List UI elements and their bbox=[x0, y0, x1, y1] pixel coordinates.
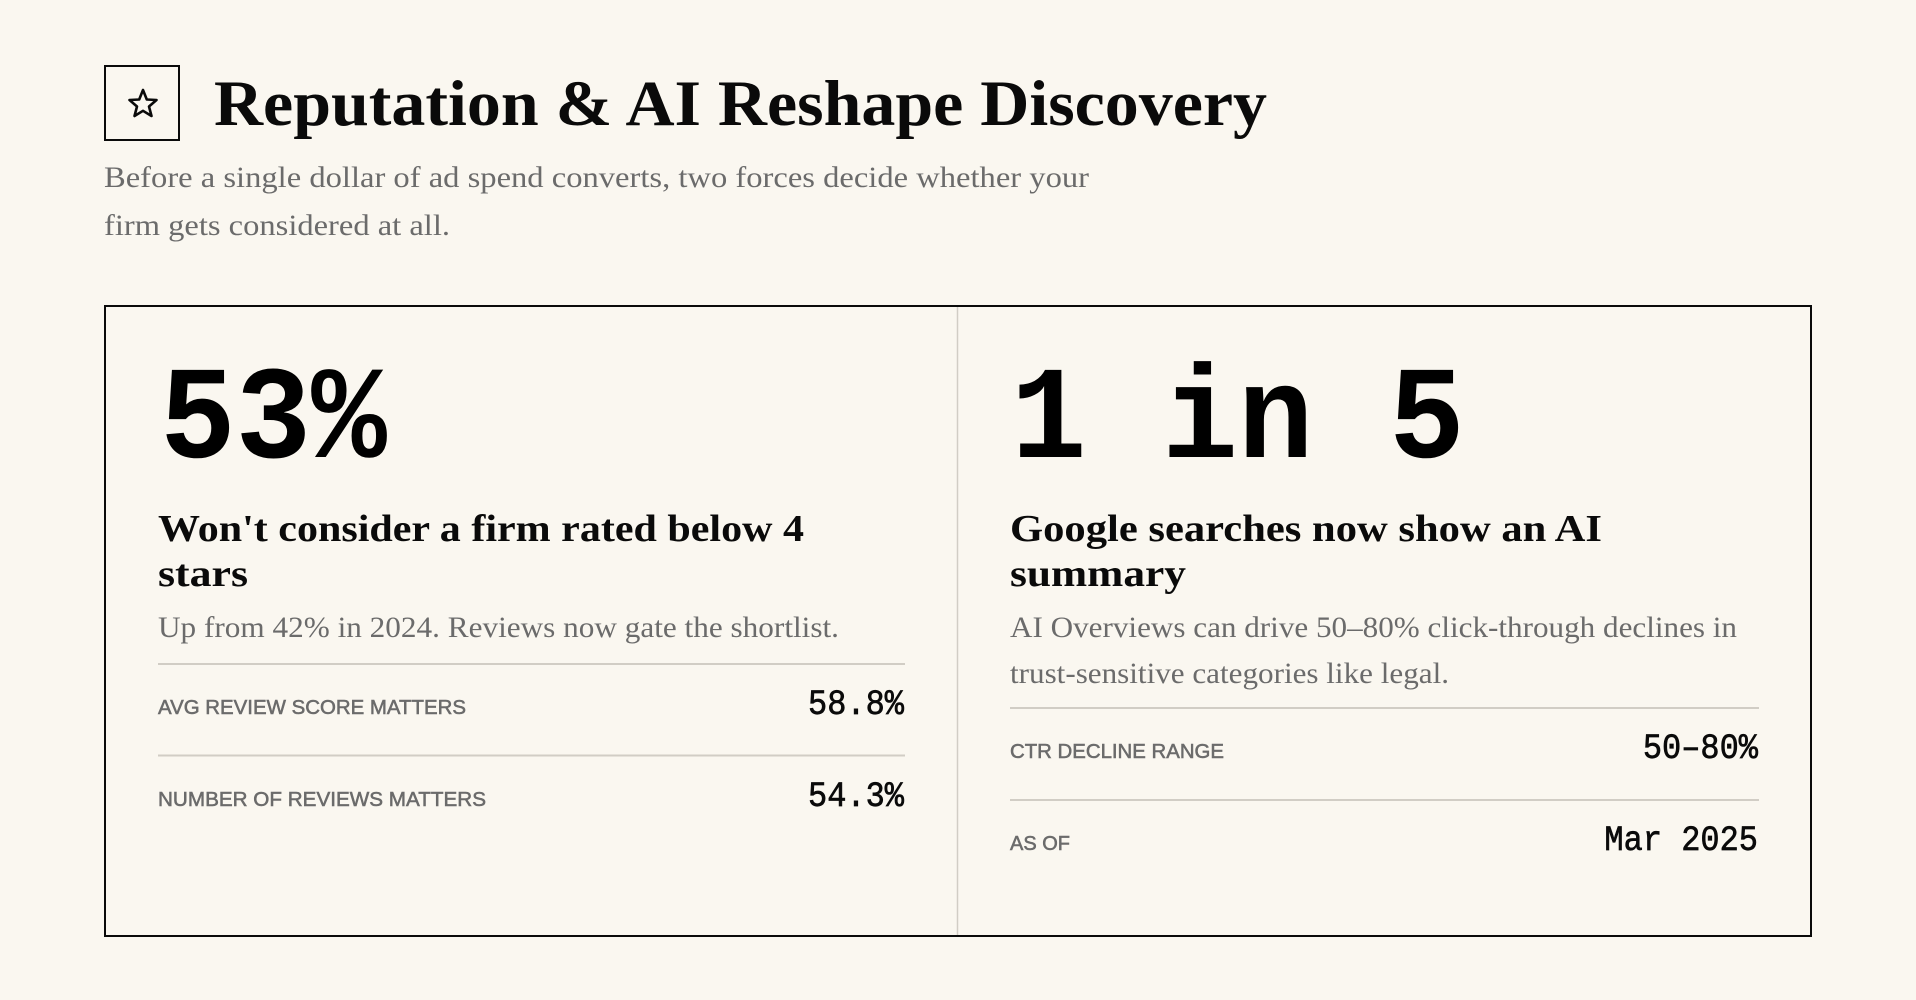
subtitle: Before a single dollar of ad spend converts, two forces decide whether your bbox=[104, 161, 1089, 194]
icon: star in square bbox=[105, 66, 179, 140]
heading: reviews: Won't consider a firm rated below 4 bbox=[158, 508, 804, 550]
row: CTR decline range: 50–80% bbox=[1643, 730, 1759, 770]
row: average review score: 58.8% bbox=[808, 686, 905, 726]
big number: 53%: 53% bbox=[160, 346, 387, 497]
panel: AI overviews stat bbox=[1010, 346, 1759, 862]
panel: stats card bbox=[105, 306, 1811, 936]
row: as of date: Mar 2025 bbox=[1604, 822, 1758, 862]
subtitle: firm gets considered at all. bbox=[104, 209, 450, 242]
heading: AI summary: summary bbox=[1010, 553, 1186, 595]
big number: 1 in 5: 1 in 5 bbox=[1011, 346, 1465, 497]
heading: reviews: stars bbox=[158, 553, 248, 595]
description: AI overviews: AI Overviews can drive 50–80% click-through declines in bbox=[1010, 611, 1737, 644]
heading: AI summary bbox=[1010, 508, 1602, 595]
subtitle bbox=[104, 161, 1089, 242]
description: AI overviews bbox=[1010, 611, 1737, 690]
panel: reviews stat bbox=[158, 346, 905, 818]
row: CTR decline range: CTR DECLINE RANGE bbox=[1010, 741, 1224, 763]
row: average review score bbox=[158, 686, 905, 726]
row: as of date: AS OF bbox=[1010, 833, 1070, 855]
description: AI overviews: trust-sensitive categories like legal. bbox=[1010, 657, 1449, 690]
header bbox=[104, 66, 1267, 242]
description: reviews: Up from 42% in 2024. Reviews now gate the shortlist. bbox=[158, 611, 839, 644]
heading: reviews bbox=[158, 508, 804, 595]
heading: AI summary: Google searches now show an AI bbox=[1010, 508, 1602, 550]
row: as of date bbox=[1010, 822, 1758, 862]
row: number of reviews: 54.3% bbox=[808, 778, 905, 818]
row: number of reviews: NUMBER OF REVIEWS MATTERS bbox=[158, 789, 486, 811]
row: CTR decline range bbox=[1010, 730, 1759, 770]
row: number of reviews bbox=[158, 778, 905, 818]
row: average review score: AVG REVIEW SCORE MATTERS bbox=[158, 697, 466, 719]
title: Reputation & AI Reshape Discovery bbox=[214, 68, 1267, 140]
